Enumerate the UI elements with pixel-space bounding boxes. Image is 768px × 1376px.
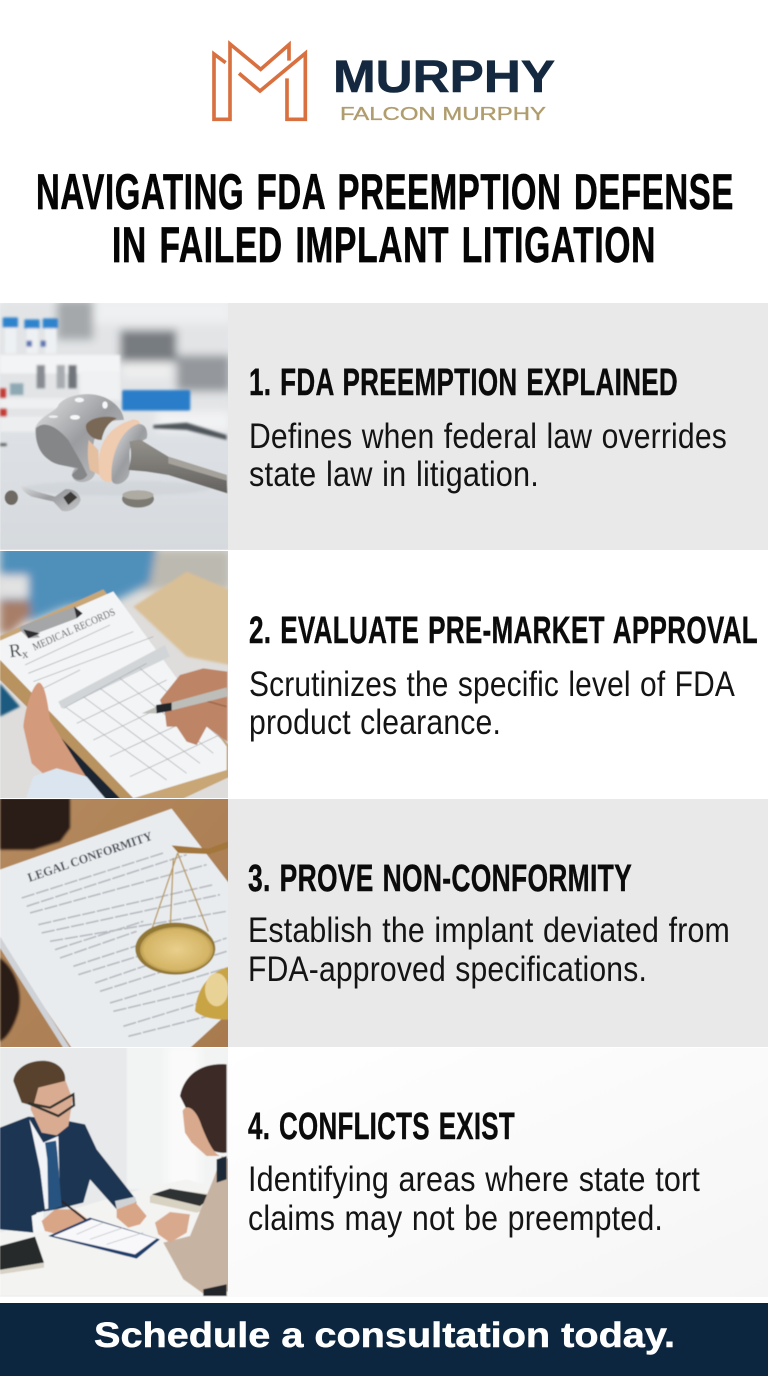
panel background (228, 551, 768, 798)
panel 1: FDA preemption explained (0, 300, 768, 550)
title (36, 164, 734, 273)
panel background (228, 303, 768, 550)
icon: M monogram (214, 44, 305, 119)
description (248, 911, 730, 989)
panel 4: conflicts exist (0, 1046, 768, 1307)
description (249, 417, 727, 494)
heading: 4. CONFLICTS EXIST (248, 1106, 515, 1148)
photo: knee implant in lab (0, 300, 230, 550)
panel 2: evaluate pre-market approval (0, 543, 768, 800)
description: FDA-approved specifications. (248, 950, 647, 989)
description: claims may not be preempted. (248, 1199, 663, 1238)
wordmark: MURPHY (333, 51, 555, 102)
description: Identifying areas where state tort (248, 1160, 700, 1199)
description (248, 1160, 700, 1238)
photo: medical records clipboard (0, 543, 230, 800)
tagline: FALCON MURPHY (340, 104, 546, 124)
call to action banner (0, 1303, 768, 1376)
photo: medical records clipboard: R (8, 640, 23, 662)
description: product clearance. (249, 703, 501, 742)
photo: medical records clipboard: x (21, 647, 29, 661)
logo: Murphy Falcon Murphy (214, 44, 555, 124)
photo: legal conformity document and scales (0, 798, 230, 1048)
description: state law in litigation. (249, 455, 539, 494)
panel 3: prove non-conformity (0, 798, 768, 1048)
description (249, 665, 735, 742)
photo: medical records clipboard: MEDICAL RECORDS (31, 607, 117, 653)
photo: attorney consulting with client (0, 1046, 230, 1307)
banner text: Schedule a consultation today. (94, 1316, 675, 1355)
panel background (228, 1048, 768, 1297)
panel background (228, 799, 768, 1047)
photo: legal conformity document and scales: LEGAL CONFORMITY (26, 829, 154, 885)
